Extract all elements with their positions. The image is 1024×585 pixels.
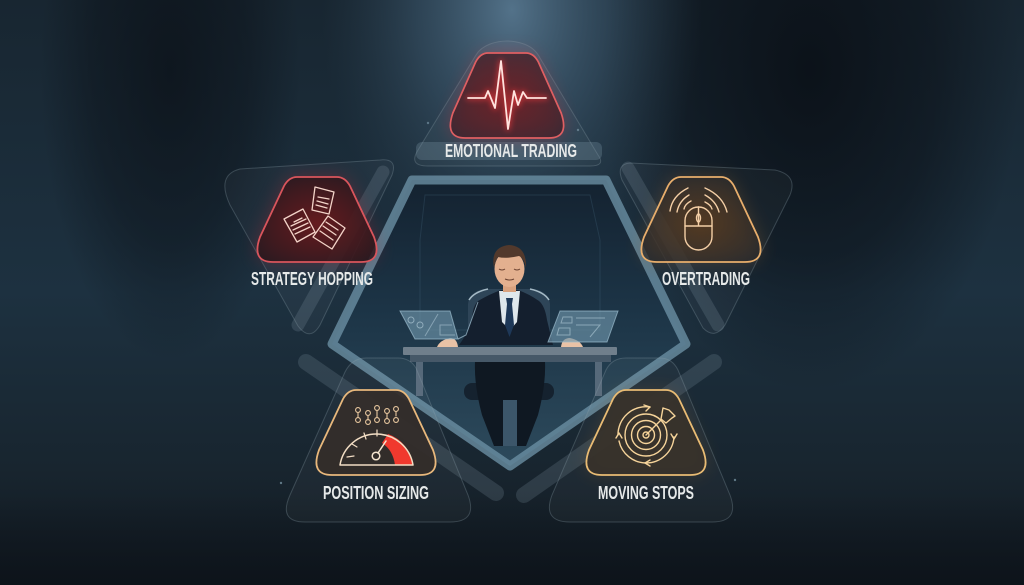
label: STRATEGY HOPPING [251,269,373,289]
label band [416,142,602,160]
badge glow [641,177,761,262]
desk [403,347,617,396]
outer frame [286,358,471,522]
chair [464,289,554,446]
panel: strategy hopping [225,160,394,334]
panel: position sizing [286,358,471,522]
icon: gauge with sliders [340,406,413,465]
shirt and tie [499,291,520,337]
trader at desk [400,245,618,446]
label: POSITION SIZING [323,483,429,503]
hands [437,338,583,347]
badge glow [586,390,706,475]
outer frame [620,163,792,333]
badge [316,390,436,475]
outer frame [549,358,733,522]
label: OVERTRADING [662,269,750,289]
outer frame [415,41,601,166]
translucent diagonal bars [298,168,718,495]
badge [450,53,564,138]
panel: moving stops [549,358,733,522]
badge [257,177,377,262]
icon: target with arrow [616,405,677,466]
outer frame [225,160,394,334]
panel: overtrading [620,163,792,333]
central pentagon frame [332,180,686,466]
head [493,245,526,292]
panel: emotional trading [415,41,602,166]
icon: heartbeat line [468,61,546,129]
label: EMOTIONAL TRADING [445,141,577,161]
icon: scattered documents [284,187,345,249]
legs [475,362,545,446]
label: MOVING STOPS [598,483,694,503]
badge glow [257,177,377,262]
badge glow [450,53,564,138]
badge [586,390,706,475]
badge [641,177,761,262]
icon: mouse with signal arcs [670,188,727,250]
suit torso [459,290,553,345]
left holographic tablet [400,302,478,339]
right holographic tablet [548,311,618,342]
